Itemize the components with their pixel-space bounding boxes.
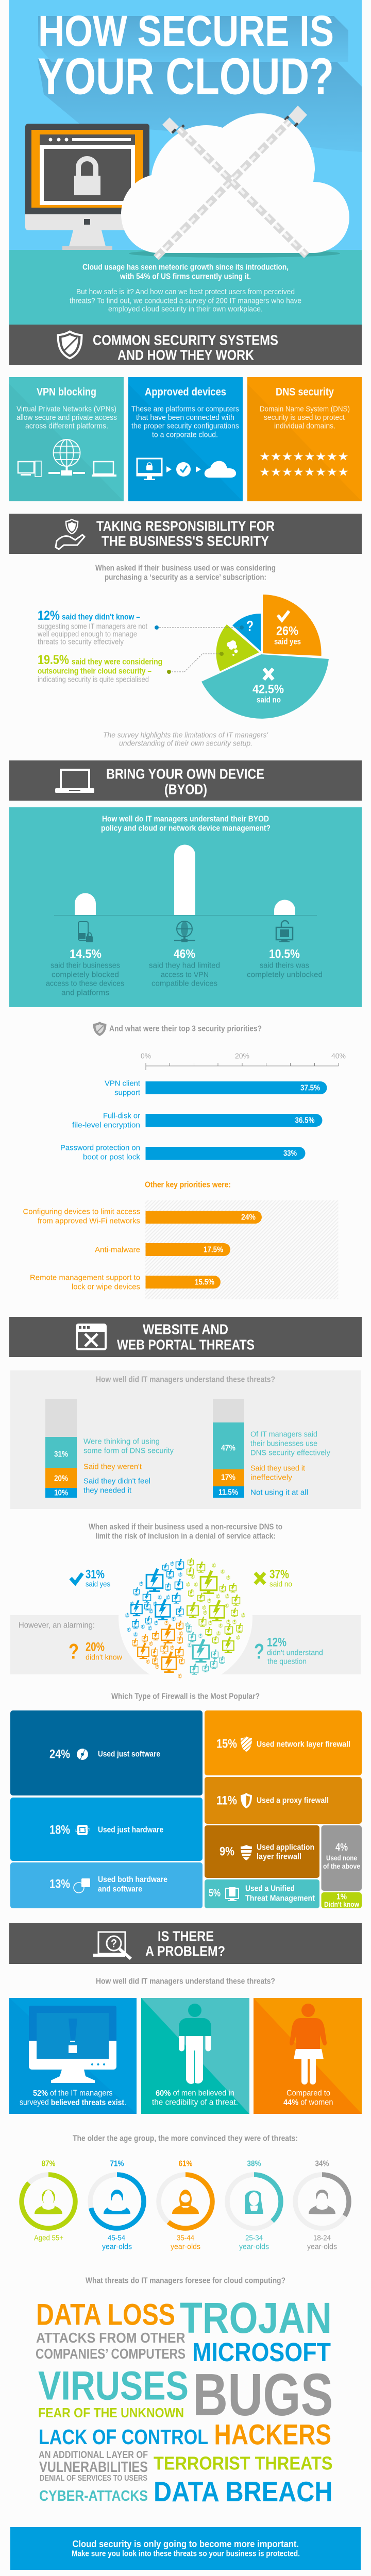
stat: 46% (149, 947, 220, 988)
bar: full-disk encryption (72, 1112, 322, 1129)
tile: both hardware and software 13%: 13% (49, 1877, 70, 1891)
ring chart: 25-34: 38% (247, 2160, 261, 2168)
word cloud: threats: TROJAN (180, 2294, 332, 2342)
intro text: Cloud usage has seen meteoric growth since its introduction, (82, 263, 289, 272)
stat: 31% said yes (71, 1567, 110, 1589)
question: How well do IT managers understand their BYOD (102, 815, 269, 823)
icon: woman (245, 2191, 263, 2214)
callout: 19.5% considering outsourcing: said they were considering (72, 657, 162, 667)
description (16, 405, 117, 431)
stacked bar: DNS used effectively: Not using it at all (250, 1488, 308, 1497)
question: non-recursive DNS: When asked if their business used a non-recursive DNS to (89, 1523, 282, 1531)
bar: full-disk encryption: Full-disk or (103, 1112, 140, 1120)
heading (106, 766, 264, 798)
word cloud: threats: AN ADDITIONAL LAYER OF (39, 2450, 148, 2461)
caption (152, 2089, 238, 2107)
callout: closing message (10, 2527, 361, 2570)
panel: BYOD chart (9, 807, 362, 1007)
tile: application layer firewall 9% (205, 1825, 319, 1878)
description: individual domains. (274, 421, 335, 431)
word cloud: threats: DATA BREACH (154, 2476, 333, 2507)
question: non-recursive DNS (89, 1523, 282, 1540)
tile: didn't know 1% (322, 1892, 362, 1908)
stat: 37% said no: said no (269, 1580, 292, 1589)
word cloud: threats: LACK OF CONTROL (39, 2425, 208, 2449)
bar: full-disk encryption: file-level encryption (72, 1121, 140, 1129)
tile: just software 24%: 24% (49, 1748, 70, 1761)
panel: alarming lower band (10, 1615, 361, 1674)
treemap: firewall types (10, 1710, 362, 1908)
stacked bar: thinking of using DNS: some form of DNS security (83, 1447, 174, 1455)
stat: 12% didn't understand: the question (267, 1657, 307, 1666)
section header: web portal threats (9, 1317, 362, 1357)
stacked bar: thinking of using DNS (45, 1399, 174, 1498)
heading: A PROBLEM? (145, 1943, 225, 1959)
caption: the credibility of a threat. (152, 2098, 238, 2107)
icon: device to check to cloud (137, 459, 236, 480)
tile: just hardware 18%: 18% (49, 1823, 70, 1837)
icon: laptop with magnifier (93, 1932, 131, 1959)
callout: 19.5% considering outsourcing (38, 653, 162, 684)
bar: VPN client support: VPN client (105, 1079, 141, 1088)
stat: 14.5% (46, 947, 124, 997)
tile: none of the above 4% (322, 1825, 362, 1891)
bar: VPN client support: 37.5% (300, 1084, 320, 1092)
icon: bearded man (172, 2190, 199, 2214)
bar: full-disk encryption: 36.5% (295, 1116, 314, 1125)
stat: 14.5%: and platforms (61, 988, 109, 997)
ring chart: aged 55+: 87% (41, 2160, 56, 2168)
question: security as a service: When asked if their business used or was considering (95, 564, 276, 573)
stacked bar: DNS used effectively: ineffectively (250, 1473, 293, 1482)
ring chart: 18-24: 34% (315, 2160, 329, 2168)
stat: 14.5%: said their businesses (50, 961, 120, 970)
intro text: threats? To find out, we conducted a survey of 200 IT managers who have (70, 297, 301, 305)
stat: 12% didn't understand (254, 1635, 323, 1666)
tile: just hardware 18% (10, 1798, 203, 1861)
stat: 10.5% (247, 947, 323, 979)
bar: remote management: Remote management support to (30, 1274, 140, 1282)
bar: configuring devices: from approved Wi-Fi networks (38, 1217, 140, 1225)
icon: cloud wrapped in chains (121, 106, 349, 258)
icon: globe network (18, 439, 116, 477)
bar chart: other priorities (23, 1200, 338, 1299)
label: 42.5% said no (252, 682, 284, 705)
heading: TAKING RESPONSIBILITY FOR (96, 518, 275, 534)
ring chart: 45-54: 45-54 (108, 2234, 125, 2242)
bar: anti-malware: Anti-malware (95, 1246, 140, 1254)
tile: none of the above 4%: Used none (326, 1854, 357, 1862)
ring chart: 35-44: 35-44 (177, 2234, 194, 2242)
heading: IS THERE (158, 1928, 214, 1944)
question: firewall: Which Type of Firewall is the Most Popular? (111, 1692, 260, 1701)
panel: VPN blocking: VPN blocking (37, 386, 96, 398)
tile: proxy firewall 11%: 11% (216, 1794, 237, 1807)
stat: 12% didn't understand: 12% (267, 1635, 286, 1650)
tile: application layer firewall 9%: Used application (257, 1843, 314, 1852)
stacked bar: DNS used effectively: DNS security effectively (250, 1449, 330, 1457)
word cloud: threats: BUGS (193, 2361, 333, 2428)
axis: percentage scale: 20% (235, 1052, 249, 1060)
heading: top 3 priorities (93, 1022, 262, 1036)
ring chart: 18-24 (295, 2160, 349, 2251)
description: the proper security configurations (131, 421, 239, 431)
stacked bar: DNS used effectively: their businesses use (250, 1439, 317, 1448)
bar: password protection: Password protection on (60, 1144, 140, 1152)
icon: thought bubble (227, 640, 238, 656)
icon: browser with cross (76, 1324, 107, 1350)
question: security as a service (95, 564, 276, 582)
hero panel (9, 0, 362, 325)
teal band (9, 250, 362, 325)
section header: common security systems (9, 325, 362, 365)
tile: application layer firewall 9%: 9% (220, 1844, 234, 1859)
callout: 19.5% considering outsourcing: outsourcing their cloud security – (38, 667, 151, 676)
word cloud: threats: MICROSOFT (192, 2337, 331, 2367)
description: Domain Name System (DNS) (260, 405, 350, 413)
section header: is there a problem (9, 1923, 362, 1964)
bar: password protection: boot or post lock (83, 1153, 141, 1161)
tile: proxy firewall 11%: Used a proxy firewall (257, 1796, 329, 1805)
icon: woman figure (290, 2004, 327, 2084)
icon: shield (58, 332, 81, 359)
ring chart: 18-24: 18-24 (313, 2234, 331, 2242)
panel: Approved devices (128, 377, 243, 501)
icon: man figure (179, 2004, 211, 2084)
icon: small shield (93, 1022, 106, 1036)
description: security is used to protect (264, 413, 345, 422)
bar chart: top priorities (60, 1079, 327, 1161)
stacked bar: DNS used effectively: 11.5% (218, 1488, 238, 1497)
heading: THE BUSINESS'S SECURITY (102, 533, 269, 549)
ring chart: aged 55+: Aged 55+ (34, 2234, 63, 2242)
description: that have been connected with (136, 413, 234, 422)
connector lines (155, 625, 244, 674)
word cloud: threats (36, 2294, 333, 2507)
icon: cross (264, 669, 273, 680)
tile: didn't know 1%: Didn't know (324, 1900, 359, 1908)
heading (145, 1928, 225, 1959)
bar: remote management (30, 1274, 221, 1291)
stat: 20% didn't know: 20% (86, 1640, 105, 1654)
stacked bar: DNS used effectively: 47% (221, 1444, 235, 1453)
stacked bar: thinking of using DNS: Were thinking of using (83, 1437, 160, 1446)
heading: BRING YOUR OWN DEVICE (106, 766, 264, 782)
bar: VPN client support (105, 1079, 327, 1097)
ring chart: 45-54: 71% (110, 2160, 124, 2168)
bar: remote management: 15.5% (195, 1278, 214, 1287)
icon: masked password stars (259, 450, 349, 479)
stat: 14.5%: 14.5% (70, 947, 102, 961)
icon: hand holding shield (56, 519, 85, 549)
stat: 20% didn't know: ? (69, 1639, 79, 1663)
stat: 46%: access to VPN (161, 971, 209, 979)
stat: 14.5%: completely blocked (52, 971, 119, 979)
question: security as a service: purchasing a ‘security as a service’ subscription: (105, 573, 266, 582)
stat: 31% said yes: 31% (86, 1567, 105, 1582)
ring chart: aged 55+ (22, 2160, 75, 2242)
icon: globe (174, 921, 195, 942)
label: 26% said yes: said yes (274, 638, 301, 646)
section header: BYOD (9, 760, 362, 801)
intro text: employed cloud security in their own workplace. (108, 305, 263, 313)
ring chart: 25-34: year-olds (239, 2242, 269, 2251)
icon: masked password stars: ★★★★★★★★ (259, 450, 349, 464)
bar chart (54, 845, 317, 915)
intro text: with 54% of US firms currently using it. (120, 272, 251, 281)
stat: 46%: 46% (174, 947, 195, 961)
heading: (BYOD) (164, 781, 207, 798)
callout: 12% didn't know: threats to security effectively (38, 638, 124, 646)
caption: 52% of the IT managers (33, 2089, 112, 2098)
panel: understanding threats stacks: How well did IT managers understand these threats? (96, 1376, 275, 1384)
word cloud: threats: DATA LOSS (36, 2298, 175, 2332)
tile: network layer firewall 15% (205, 1710, 362, 1775)
description (131, 405, 239, 439)
icon: unlocked monitor (276, 921, 293, 942)
bar: anti-malware: 17.5% (204, 1246, 223, 1254)
ring chart: 35-44: 61% (178, 2160, 193, 2168)
bar: password protection: 33% (283, 1149, 297, 1158)
long title shadow (38, 16, 362, 152)
text: however an alarming: However, an alarming: (19, 1621, 95, 1630)
callout: 12% didn't know (37, 608, 148, 646)
ring chart: 35-44: year-olds (171, 2242, 200, 2251)
panel: 60% of men (141, 1998, 249, 2114)
description: to a corporate cloud. (152, 431, 218, 439)
stacked bar: thinking of using DNS: they needed it (83, 1486, 132, 1495)
callout: 19.5% considering outsourcing: 19.5% (38, 653, 69, 667)
tile: network layer firewall 15%: Used network layer firewall (257, 1740, 350, 1749)
icon: check (278, 611, 289, 620)
caption (20, 2089, 126, 2107)
icon: balding man (35, 2190, 62, 2214)
axis: percentage scale (141, 1052, 346, 1070)
stat: 10.5%: completely unblocked (247, 971, 323, 979)
word cloud: threats: HACKERS (214, 2418, 331, 2450)
stat: 46%: compatible devices (151, 979, 217, 988)
icon: phone with lock (78, 922, 93, 942)
icon: question mark: ? (246, 618, 254, 635)
survey note: understanding of their own security setup. (119, 739, 252, 748)
tile: proxy firewall 11% (205, 1777, 362, 1824)
question: policy and cloud or network device management? (101, 824, 271, 833)
stacked bar: DNS used effectively: Of IT managers said (250, 1430, 317, 1438)
word cloud: threats: VULNERABILITIES (39, 2459, 148, 2476)
tile: both hardware and software 13% (10, 1862, 203, 1908)
question (101, 815, 271, 833)
description: These are platforms or computers (131, 405, 239, 413)
word cloud: threats: CYBER-ATTACKS (39, 2488, 148, 2504)
description: allow secure and private access (16, 413, 117, 422)
heading (96, 518, 275, 549)
axis: percentage scale: 0% (141, 1052, 151, 1060)
caption: Compared to (286, 2089, 330, 2098)
tile: just hardware 18%: Used just hardware (98, 1826, 163, 1834)
stat: 14.5%: access to these devices (46, 979, 124, 988)
ring chart: 18-24: year-olds (307, 2242, 337, 2251)
stacked bar: DNS used effectively: Said they used it (250, 1464, 306, 1472)
stacked bar: DNS used effectively: 17% (221, 1473, 235, 1482)
stacked bar: thinking of using DNS: 31% (54, 1450, 68, 1459)
panel: DNS security (247, 377, 362, 501)
icon: desktop monitor with padlock (25, 124, 149, 250)
tile: both hardware and software 13%: Used both hardware (98, 1875, 167, 1884)
panel: DNS security: DNS security (276, 386, 334, 398)
intro text (70, 263, 301, 313)
tile: application layer firewall 9%: layer firewall (257, 1853, 301, 1861)
stat: 46%: said they had limited (149, 961, 220, 970)
tile: unified threat management 5%: 5% (209, 1888, 221, 1899)
callout: closing message: Make sure you look into these threats so your business is protected. (72, 2549, 300, 2558)
word cloud: threats: ATTACKS FROM OTHER (36, 2330, 185, 2346)
word cloud: threats: FEAR OF THE UNKNOWN (38, 2405, 184, 2420)
ring chart: 35-44 (159, 2160, 212, 2251)
callout: 19.5% considering outsourcing: indicating security is quite specialised (38, 675, 149, 684)
description: Virtual Private Networks (VPNs) (16, 405, 116, 413)
panel: 44% of women (254, 1998, 362, 2114)
stacked bar: DNS used effectively (213, 1399, 330, 1498)
icon: young man (309, 2190, 335, 2214)
section header: taking responsibility (9, 514, 362, 554)
heading: WEB PORTAL THREATS (117, 1336, 255, 1353)
heading: other key priorities: Other key priorities were: (145, 1181, 231, 1189)
bar: configuring devices (23, 1208, 262, 1225)
stat: 20% didn't know: didn't know (86, 1653, 122, 1662)
bar: configuring devices: 24% (241, 1213, 256, 1222)
callout: closing message: Cloud security is only going to become more important. (72, 2539, 299, 2549)
pie chart: security as a service (201, 595, 329, 719)
panel: VPN blocking (9, 377, 124, 501)
panel: 52% believed threats exist (9, 1998, 137, 2114)
intro text: But how safe is it? And how can we best protect users from perceived (76, 287, 295, 296)
stat: 12% didn't understand: ? (254, 1639, 264, 1663)
tile: both hardware and software 13%: and software (98, 1885, 142, 1894)
callout: 12% didn't know: suggesting some IT managers are not (38, 622, 148, 631)
bar: anti-malware (95, 1243, 230, 1256)
label: 26% said yes (274, 624, 301, 646)
callout: 12% didn't know: 12% (38, 608, 60, 623)
ring chart: 45-54: year-olds (102, 2242, 132, 2251)
callout: 12% didn't know: well equipped enough to manage (37, 630, 137, 639)
label: 42.5% said no: 42.5% (252, 682, 284, 697)
stat: 37% said no: 37% (269, 1567, 289, 1582)
heading: age group: The older the age group, the more convinced they were of threats: (73, 2134, 298, 2143)
stacked bar: thinking of using DNS: Said they weren't (83, 1462, 142, 1471)
stat: 20% didn't know (69, 1639, 122, 1663)
icon: laptop (55, 770, 94, 793)
stacked bar: thinking of using DNS: Said they didn't feel (83, 1477, 150, 1486)
stacked bar: thinking of using DNS: 10% (54, 1489, 68, 1497)
word cloud: threats: VIRUSES (38, 2363, 189, 2408)
tile: none of the above 4%: of the above (323, 1862, 360, 1870)
tile: network layer firewall 15%: 15% (216, 1737, 237, 1751)
tile: unified threat management 5% (205, 1879, 319, 1908)
tile: unified threat management 5%: Used a Unified (245, 1885, 295, 1893)
title (38, 7, 334, 105)
caption: surveyed believed threats exist. (20, 2098, 126, 2107)
heading (117, 1321, 255, 1353)
tile: none of the above 4%: 4% (335, 1842, 348, 1853)
bar: remote management: lock or wipe devices (72, 1283, 140, 1291)
stat: 10.5%: 10.5% (269, 947, 300, 961)
heading: AND HOW THEY WORK (117, 347, 254, 363)
survey note (103, 731, 268, 748)
stat: 37% said no (255, 1567, 292, 1589)
axis: percentage scale: 40% (331, 1052, 346, 1060)
panel: Approved devices: Approved devices (145, 386, 226, 398)
bar: configuring devices: Configuring devices to limit access (23, 1208, 140, 1216)
word cloud: threats: DENIAL OF SERVICES TO USERS (40, 2474, 147, 2483)
ring chart: 25-34 (227, 2160, 281, 2251)
ring chart: 25-34: 25-34 (245, 2234, 263, 2242)
icon: laptop with magnifier: ? (111, 1937, 117, 1950)
description (260, 405, 350, 431)
question: understanding threats: How well did IT managers understand these threats? (96, 1977, 275, 1986)
icon cluster: monitors under attack (119, 1551, 252, 1685)
caption: 60% of men believed in (156, 2089, 234, 2098)
icon: man (104, 2190, 130, 2214)
word cloud: threats: TERRORIST THREATS (154, 2452, 333, 2474)
stacked bar: thinking of using DNS: 20% (54, 1475, 68, 1483)
tile: just software 24%: Used just software (98, 1750, 160, 1759)
label: 42.5% said no: said no (257, 696, 281, 705)
panel: understanding threats stacks (10, 1370, 361, 1509)
description: across different platforms. (25, 421, 108, 431)
heading: top 3 priorities: And what were their top 3 security priorities? (109, 1024, 262, 1033)
heading (93, 332, 278, 363)
stat: 12% didn't understand: didn't understand (267, 1649, 323, 1657)
ring chart: 45-54 (90, 2160, 144, 2251)
caption (283, 2089, 333, 2107)
heading: COMMON SECURITY SYSTEMS (93, 332, 278, 348)
stat: 10.5%: said theirs was (260, 961, 309, 970)
caption: 44% of women (283, 2098, 333, 2107)
stat: 31% said yes: said yes (86, 1580, 110, 1589)
tile: didn't know 1%: 1% (336, 1893, 347, 1901)
callout: 12% didn't know: said they didn't know – (62, 613, 140, 621)
icon: monitor with exclamation (29, 2006, 116, 2083)
bar: VPN client support: support (114, 1088, 141, 1097)
survey note: The survey highlights the limitations of IT managers' (103, 731, 268, 740)
question: foreseen threats: What threats do IT managers foresee for cloud computing? (86, 2276, 285, 2285)
icon: masked password stars: ★★★★★★★★ (259, 466, 349, 479)
question: non-recursive DNS: limit the risk of inclusion in a denial of service attack: (95, 1532, 276, 1540)
tile: unified threat management 5%: Threat Management (245, 1894, 315, 1903)
label: 26% said yes: 26% (276, 624, 298, 638)
word cloud: threats: COMPANIES’ COMPUTERS (36, 2346, 185, 2362)
heading: WEBSITE AND (143, 1321, 228, 1337)
tile: just software 24% (10, 1710, 203, 1795)
bar: password protection (60, 1144, 305, 1161)
